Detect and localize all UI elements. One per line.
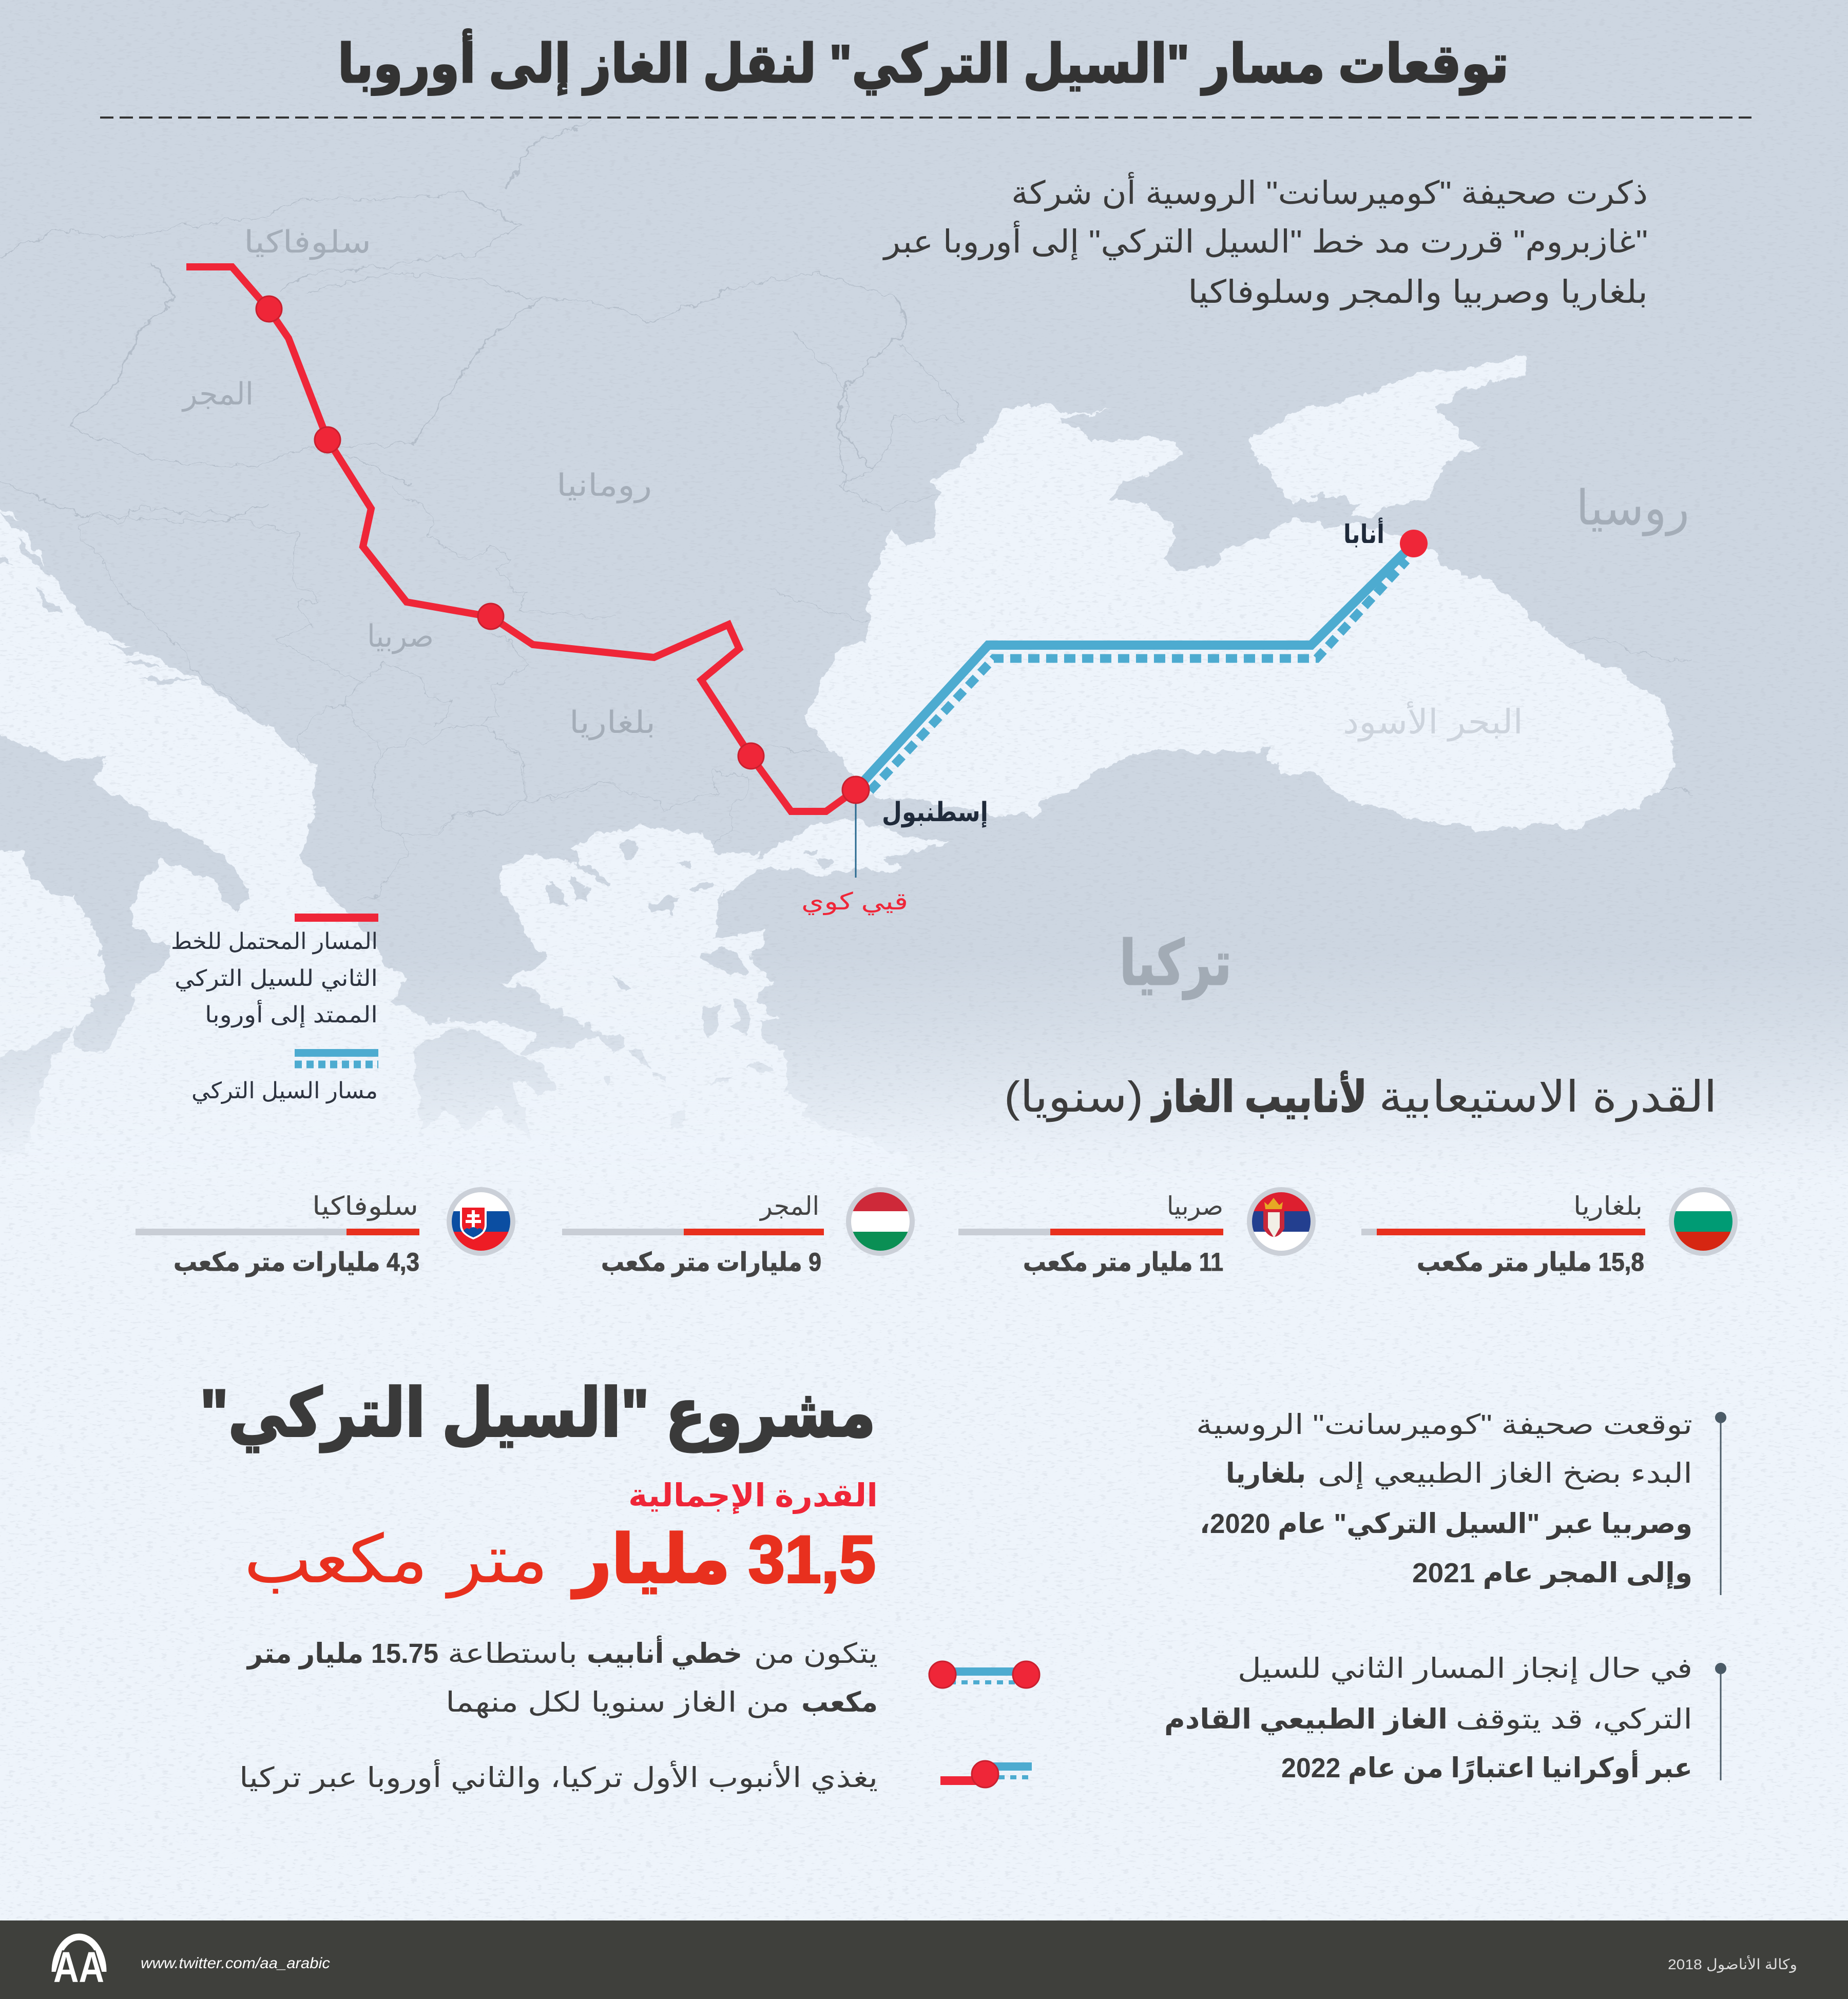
map country labels: البحر الأسود xyxy=(1343,701,1523,742)
feed text: يغذي الأنبوب الأول تركيا، والثاني أوروبا عبر تركيا xyxy=(239,1759,878,1794)
map country labels: المجر xyxy=(181,377,254,412)
capacity: hungary: 9 مليارات متر مكعب xyxy=(601,1248,821,1277)
black sea shape xyxy=(802,405,1674,830)
capacity heading: لأنابيب الغاز xyxy=(1151,1071,1367,1122)
note: start of gas pumping: توقعت صحيفة "كوميرسانت" الروسية xyxy=(1196,1409,1692,1441)
map country labels: رومانيا xyxy=(556,468,652,503)
adriatic and ionian sea shape xyxy=(0,503,530,1234)
twitter url: www.twitter.com/aa_arabic xyxy=(141,1955,330,1972)
capacity: bulgaria xyxy=(1361,1187,1740,1277)
total capacity value: 31,5 مليار xyxy=(571,1522,876,1599)
total capacity label: القدرة الإجمالية xyxy=(628,1478,878,1514)
sicily land xyxy=(0,1025,74,1155)
credit: وكالة الأناضول 2018 xyxy=(1668,1955,1797,1973)
capacity: slovakia xyxy=(136,1187,518,1277)
map country labels: تركيا xyxy=(1120,929,1231,999)
note: ukraine transit: الغاز الطبيعي القادم xyxy=(1164,1704,1448,1735)
route: turkstream xyxy=(855,544,1414,791)
pipelines text: يتكون من xyxy=(754,1638,878,1670)
label istanbul: إسطنبول xyxy=(882,798,988,828)
peloponnese land xyxy=(412,1029,557,1143)
legend: المسار المحتمل للخط xyxy=(171,929,378,955)
pipelines text xyxy=(246,1635,878,1718)
legend: مسار السيل التركي xyxy=(191,1078,378,1104)
total capacity value: متر مكعب xyxy=(244,1522,548,1599)
intro text: بلغاريا وصربيا والمجر وسلوفاكيا xyxy=(1188,275,1648,310)
flag serbia xyxy=(1247,1191,1319,1252)
italy land xyxy=(0,727,252,1053)
note: start of gas pumping xyxy=(1196,1409,1726,1595)
bottom fade of map xyxy=(0,949,1848,1186)
legend xyxy=(171,914,378,1104)
note: start of gas pumping: وصربيا عبر "السيل التركي" عام 2020، xyxy=(1200,1508,1692,1540)
legend: الثاني للسيل التركي xyxy=(175,966,378,992)
flag bulgaria xyxy=(1668,1191,1740,1252)
note: ukraine transit: عبر أوكرانيا اعتبارًا من عام 2022 xyxy=(1281,1750,1692,1784)
footer xyxy=(0,1920,1848,1999)
note: start of gas pumping: وإلى المجر عام 2021 xyxy=(1412,1558,1692,1589)
marmara sea shape xyxy=(721,820,950,895)
capacity heading: (سنويا) xyxy=(1004,1073,1143,1122)
istanbul point xyxy=(842,777,869,878)
map country labels: روسيا xyxy=(1576,481,1689,536)
aegean sea shape xyxy=(338,826,928,1235)
capacity heading: القدرة الاستيعابية xyxy=(1379,1073,1717,1122)
note: start of gas pumping: بلغاريا xyxy=(1226,1458,1306,1489)
anapa point xyxy=(1400,530,1428,557)
capacity: hungary xyxy=(562,1187,919,1277)
icon: pipeline feed xyxy=(940,1761,1032,1788)
dalmatian islands xyxy=(0,511,196,684)
gulf of corinth shape xyxy=(417,1021,538,1052)
intro text: "غازبروم" قررت مد خط "السيل التركي" إلى أوروبا عبر xyxy=(882,221,1648,261)
route: possible second line to Europe xyxy=(186,267,856,811)
project heading: مشروع "السيل التركي" xyxy=(200,1375,876,1452)
pipelines text: خطي أنابيب xyxy=(587,1635,742,1670)
flag hungary xyxy=(847,1191,919,1252)
total capacity value xyxy=(244,1522,876,1599)
map country labels: سلوفاكيا xyxy=(244,225,371,260)
map country labels xyxy=(181,225,1689,999)
legend: الممتد إلى أوروبا xyxy=(205,1000,378,1028)
title: توقعات مسار "السيل التركي" لنقل الغاز إلى أوروبا xyxy=(338,29,1509,95)
note: start of gas pumping: البدء بضخ الغاز الطبيعي إلى xyxy=(1318,1458,1692,1490)
icon: two pipelines xyxy=(929,1661,1040,1688)
capacity: bulgaria: 15,8 مليار متر مكعب xyxy=(1417,1248,1644,1277)
aegean islands xyxy=(516,840,928,1127)
pipelines text: مكعب xyxy=(801,1687,878,1718)
capacity: hungary: المجر xyxy=(759,1192,819,1221)
map background xyxy=(0,0,1848,1340)
capacity: serbia: صربيا xyxy=(1167,1192,1223,1221)
intro text xyxy=(882,172,1648,310)
logo: AA xyxy=(53,1943,104,1991)
intro text: ذكرت صحيفة "كوميرسانت" الروسية أن شركة xyxy=(1011,172,1648,211)
note: ukraine transit: في حال إنجاز المسار الثاني للسيل xyxy=(1238,1653,1692,1684)
note: ukraine transit xyxy=(1164,1653,1726,1784)
route node circles xyxy=(256,296,764,769)
pipelines text: من الغاز سنويا لكل منهما xyxy=(446,1687,790,1718)
capacity heading xyxy=(1004,1071,1717,1122)
label kiyikoy: قيي كوي xyxy=(801,888,908,916)
flag slovakia xyxy=(447,1191,518,1252)
map country labels: صربيا xyxy=(367,619,434,654)
capacity: bulgaria: بلغاريا xyxy=(1573,1192,1643,1221)
note: ukraine transit: التركي، قد يتوقف xyxy=(1456,1704,1692,1735)
capacity: slovakia: 4,3 مليارات متر مكعب xyxy=(174,1248,419,1277)
capacity: serbia xyxy=(958,1187,1319,1277)
sea of azov shape xyxy=(1250,359,1527,517)
country borders xyxy=(0,123,1694,900)
capacity: slovakia: سلوفاكيا xyxy=(312,1192,418,1221)
label anapa: أنابا xyxy=(1343,517,1384,549)
pipelines text: باستطاعة xyxy=(448,1638,578,1669)
capacity: serbia: 11 مليار متر مكعب xyxy=(1023,1248,1223,1277)
pipelines text: 15.75 مليار متر xyxy=(246,1638,438,1670)
map country labels: بلغاريا xyxy=(569,705,656,741)
